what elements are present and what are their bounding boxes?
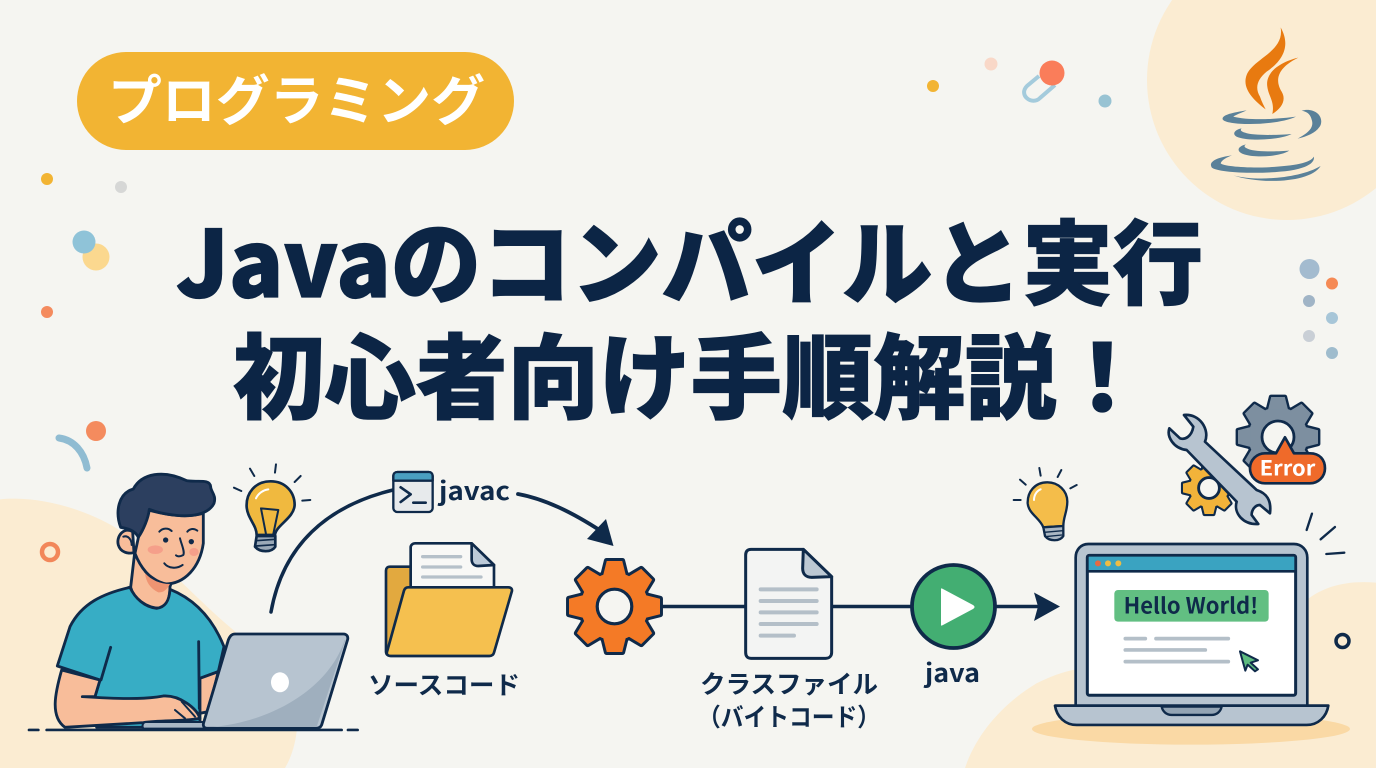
icon: light bulb left xyxy=(234,464,310,551)
screen xyxy=(1087,555,1296,695)
hair xyxy=(118,474,215,537)
icon: folder with source file xyxy=(386,543,512,656)
category badge xyxy=(77,52,514,150)
icon: compile gear xyxy=(569,561,660,652)
chin shadow xyxy=(145,573,170,592)
laptop lid xyxy=(203,634,348,728)
title xyxy=(176,191,1203,438)
decorative ring: navy xyxy=(1336,634,1349,648)
icon: class file document xyxy=(746,549,832,658)
icon: terminal window xyxy=(393,472,433,512)
ear xyxy=(118,530,134,553)
wrench xyxy=(1169,415,1270,524)
left arm xyxy=(55,670,200,727)
hand fingers xyxy=(175,702,195,718)
laptop keyboard xyxy=(143,722,204,729)
cursor xyxy=(1240,651,1258,671)
icon: spark lines xyxy=(1307,514,1344,554)
window dots xyxy=(1095,560,1121,566)
label: class file xyxy=(698,665,880,734)
decorative arc xyxy=(59,438,87,468)
gray gear xyxy=(1238,397,1318,477)
head xyxy=(135,510,203,584)
t-shirt xyxy=(57,587,224,727)
error badge xyxy=(1250,437,1325,483)
laptop lid xyxy=(1076,544,1307,707)
label: javac: javac xyxy=(437,472,510,508)
person at laptop xyxy=(29,474,358,730)
icon: settings gears, wrench and error badge xyxy=(1169,397,1325,524)
icon: Java logo xyxy=(1211,27,1321,181)
icon: run button xyxy=(912,565,995,648)
arrow: play to laptop xyxy=(996,592,1060,621)
notch xyxy=(1162,707,1222,715)
neck xyxy=(131,550,173,608)
table line xyxy=(29,726,358,734)
decorative capsule xyxy=(1024,60,1064,101)
hello world banner xyxy=(1114,590,1269,622)
decorative dots xyxy=(41,58,1338,441)
title bar xyxy=(1087,555,1296,571)
label: class file: （バイトコード） xyxy=(698,698,880,734)
yellow gear xyxy=(1183,462,1235,514)
background blob: bottom right xyxy=(965,582,1376,768)
laptop shade xyxy=(213,640,345,727)
laptop logo xyxy=(271,672,289,692)
shirt fold line xyxy=(101,642,199,708)
title: Javaのコンパイルと実行 xyxy=(176,191,1203,324)
line: gear to class file to play xyxy=(655,605,912,608)
laptop with Hello World xyxy=(1032,544,1350,745)
cheeks xyxy=(148,545,163,554)
arrow: curve to javac xyxy=(271,490,393,612)
category badge: プログラミング xyxy=(108,57,485,136)
error badge: Error xyxy=(1260,451,1316,481)
background blob: top right circle xyxy=(1147,0,1376,220)
label: java: java xyxy=(923,654,980,690)
arrow: javac to gear xyxy=(518,494,614,546)
eyes xyxy=(163,537,168,543)
label: class file: クラスファイル xyxy=(700,665,878,701)
background blob: bottom left xyxy=(0,499,297,768)
laptop base xyxy=(1055,706,1328,725)
laptop shadow xyxy=(1032,713,1350,745)
face details xyxy=(123,529,197,584)
label: source code: ソースコード xyxy=(368,666,520,702)
hello world text: Hello World! xyxy=(1124,589,1258,621)
right forearm xyxy=(200,672,218,713)
decorative ring: orange xyxy=(42,544,58,560)
text lines xyxy=(1125,639,1228,662)
title: 初心者向け手順解説！ xyxy=(233,305,1148,438)
icon: light bulb right xyxy=(1014,468,1077,540)
